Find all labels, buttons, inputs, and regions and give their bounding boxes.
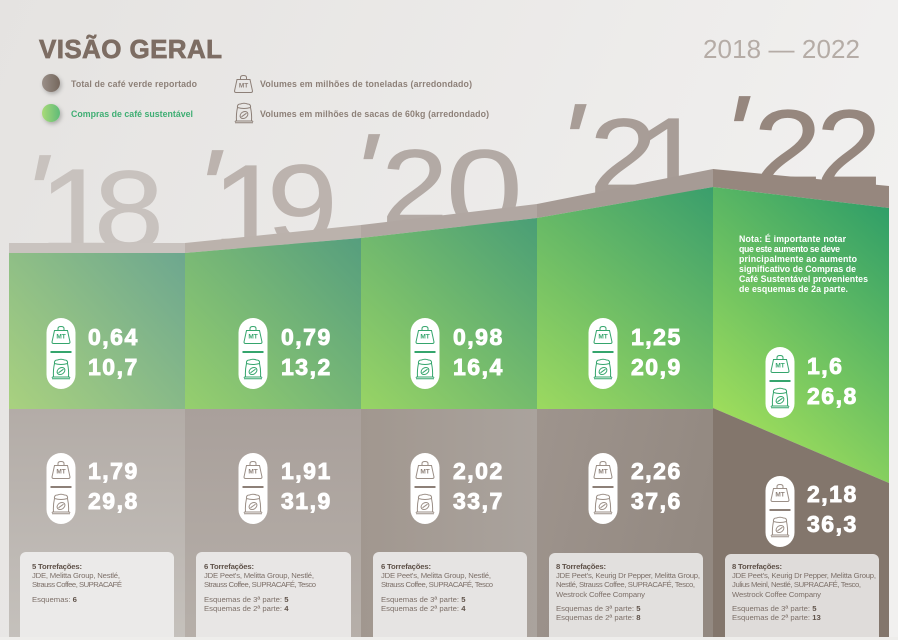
card: 2020: 6 Torrefações: xyxy=(381,562,431,571)
year label: 2022: ' xyxy=(711,74,760,192)
pill: 2020 sustainable: MT xyxy=(420,334,430,340)
band 2018 xyxy=(9,243,185,253)
year label: 2019 xyxy=(184,128,338,274)
pill: 2018 sustainable: MT xyxy=(56,334,66,340)
card: 2018: 5 Torrefações: xyxy=(32,562,82,571)
values: 2022 total: 2,18 xyxy=(807,481,858,507)
sustainable area 2019 xyxy=(185,238,361,409)
year label: 2020: 0 xyxy=(446,126,523,252)
year label: 2018 xyxy=(11,133,164,278)
year label: 2018: ' xyxy=(11,133,61,251)
pill: 2020 total: MT xyxy=(420,468,430,476)
card: 2018: JDE, Melitta Group, Nestlé, xyxy=(32,571,120,580)
card: 2021: Esquemas de 2ª parte: 8 xyxy=(556,613,641,622)
legend: total green coffee: Total de café verde reportado xyxy=(71,79,198,89)
values: 2021 total: 37,6 xyxy=(631,488,682,514)
year label: 2018: 1 xyxy=(39,145,111,278)
year label: 2022 xyxy=(711,74,881,208)
note: Café Sustentável provenientes xyxy=(739,274,868,284)
pill: 2019 total: MT xyxy=(248,468,258,476)
card: 2022: Esquemas de 2ª parte: 13 xyxy=(732,613,821,622)
values: 2018 total: 1,79 xyxy=(88,458,139,484)
band 2021 xyxy=(537,169,713,218)
sustainable area 2020 xyxy=(361,218,537,409)
pill: 2022 sustainable: MT xyxy=(775,362,785,370)
values: 2022 sustainable: 26,8 xyxy=(807,383,858,409)
pill: 2018 sustainable xyxy=(46,318,76,389)
values: 2021 sustainable: 20,9 xyxy=(631,354,682,380)
pill: 2021 sustainable xyxy=(588,318,618,389)
card: 2022 xyxy=(725,554,879,640)
values: 2021 sustainable: 1,25 xyxy=(631,324,682,350)
values: 2019 total: 1,91 xyxy=(281,458,332,484)
column: 2022 xyxy=(713,169,889,640)
card: 2022: Julius Meinl, Nestlé, SUPRACAFÉ, Tesco, xyxy=(732,580,861,589)
pill: 2022 total: MT xyxy=(775,492,785,498)
year label: 2022: 2 xyxy=(816,87,881,208)
note: principalmente ao aumento xyxy=(739,254,858,264)
values: 2019 sustainable: 0,79 xyxy=(281,324,332,350)
card: 2021 xyxy=(549,553,703,640)
note: que este aumento se deve xyxy=(739,244,840,254)
year label: 2021: 1 xyxy=(637,95,705,220)
year label: 2020 xyxy=(340,112,523,252)
values: 2020 sustainable: 16,4 xyxy=(453,354,504,380)
column: 2020 xyxy=(361,204,537,640)
card: 2022: Esquemas de 3ª parte: 5 xyxy=(732,604,817,613)
pill: 2021 total xyxy=(588,453,618,524)
sustainable area 2018 xyxy=(9,253,185,409)
pill: 2020 total xyxy=(410,453,440,524)
values: 2020 total: 2,02 xyxy=(453,458,504,484)
values: 2018 sustainable xyxy=(88,324,139,380)
column: 2019 xyxy=(185,225,361,640)
card: 2022: 8 Torrefações: xyxy=(732,562,782,571)
values: 2019 sustainable xyxy=(281,324,332,380)
values: 2019 total xyxy=(281,458,332,514)
values: 2022 sustainable: 1,6 xyxy=(807,353,843,379)
values: 2018 total: 29,8 xyxy=(88,488,139,514)
sustainable area 2022 xyxy=(713,187,889,483)
card: 2022: Westrock Coffee Company xyxy=(732,590,821,599)
total area 2020 xyxy=(361,409,537,640)
sustainable area 2021 xyxy=(537,187,713,409)
card: 2018: Esquemas: 6 xyxy=(32,595,77,604)
legend: sacks volume: Volumes em milhões de sacas de 60kg (arredondado) xyxy=(260,109,489,119)
pill: 2021 total: MT xyxy=(598,468,608,476)
pill: 2019 sustainable xyxy=(238,318,268,389)
card: 2021: Nestlé, Strauss Coffee, SUPRACAFÉ, Tesco, xyxy=(556,580,695,589)
note: de esquemas de 2a parte. xyxy=(739,284,848,294)
values: 2018 sustainable: 10,7 xyxy=(88,354,139,380)
values: 2019 total: 31,9 xyxy=(281,488,332,514)
values: 2022 total xyxy=(807,481,858,537)
legend xyxy=(42,74,489,123)
legend: sacks volume xyxy=(235,103,489,123)
values: 2022 sustainable xyxy=(807,353,858,409)
pill: 2018 total xyxy=(46,453,76,524)
values: 2022 total: 36,3 xyxy=(807,511,858,537)
total area 2021 xyxy=(537,409,713,640)
column: 2018 xyxy=(9,243,185,640)
column: 2021 xyxy=(537,169,713,640)
card: 2019: Esquemas de 3ª parte: 5 xyxy=(204,595,289,604)
card: 2019: 6 Torrefações: xyxy=(204,562,254,571)
values: 2020 total xyxy=(453,458,504,514)
band 2020 xyxy=(361,204,537,238)
values: 2020 sustainable xyxy=(453,324,504,380)
year label: 2021: ' xyxy=(547,82,596,200)
card: 2020: Esquemas de 3ª parte: 5 xyxy=(381,595,466,604)
year label: 2020: ' xyxy=(340,112,390,230)
card: 2019: Esquemas de 2ª parte: 4 xyxy=(204,604,289,613)
card: 2021: 8 Torrefações: xyxy=(556,562,606,571)
year label: 2019: 1 xyxy=(212,141,284,274)
note: Nota: É importante notar xyxy=(739,234,847,244)
card: 2020 xyxy=(373,552,527,640)
band 2019 xyxy=(185,225,361,253)
total area 2018 xyxy=(9,409,185,640)
legend: total green coffee xyxy=(42,74,198,92)
card: 2022: JDE Peet's, Keurig Dr Pepper, Melitta Group, xyxy=(732,571,876,580)
values: 2020 total: 33,7 xyxy=(453,488,504,514)
legend: tonnes volume xyxy=(234,76,472,92)
year label: 2020: 2 xyxy=(382,128,448,245)
pill: 2020 sustainable xyxy=(410,318,440,389)
legend: tonnes volume: Volumes em milhões de toneladas (arredondado) xyxy=(260,79,472,89)
note xyxy=(739,234,868,294)
title: VISÃO GERAL xyxy=(39,34,222,64)
total area 2022 xyxy=(713,408,889,640)
values: 2020 sustainable: 0,98 xyxy=(453,324,504,350)
card: 2020: Strauss Coffee, SUPRACAFÉ, Tesco xyxy=(381,580,493,589)
card: 2020: Esquemas de 2ª parte: 4 xyxy=(381,604,466,613)
year label: 2022: 2 xyxy=(753,88,822,208)
values: 2018 total xyxy=(88,458,139,514)
card: 2019 xyxy=(196,552,351,640)
pill: 2019 total xyxy=(238,453,268,524)
card: 2018 xyxy=(20,552,174,640)
year label: 2018: 8 xyxy=(94,148,164,273)
card: 2020: JDE Peet's, Melitta Group, Nestlé, xyxy=(381,571,491,580)
values: 2018 sustainable: 0,64 xyxy=(88,324,139,350)
card: 2021: Esquemas de 3ª parte: 5 xyxy=(556,604,641,613)
values: 2021 total xyxy=(631,458,682,514)
year label: 2019: 9 xyxy=(267,143,338,267)
card: 2019: Strauss Coffee, SUPRACAFÉ, Tesco xyxy=(204,580,316,589)
year label: 2021: 2 xyxy=(590,97,657,216)
year label: 2019: ' xyxy=(184,128,233,246)
values: 2019 sustainable: 13,2 xyxy=(281,354,332,380)
card: 2021: Westrock Coffee Company xyxy=(556,590,645,599)
pill: 2022 total xyxy=(766,476,794,547)
values: 2021 total: 2,26 xyxy=(631,458,682,484)
card: 2019: JDE Peet's, Melitta Group, Nestlé, xyxy=(204,571,314,580)
values: 2021 sustainable xyxy=(631,324,682,380)
pill: 2019 sustainable: MT xyxy=(248,334,258,340)
legend: sustainable purchases xyxy=(42,104,193,122)
year label: 2021 xyxy=(547,82,705,220)
note: significativo de Compras de xyxy=(739,264,856,274)
band 2022 xyxy=(713,169,889,208)
card: 2018: Strauss Coffee, SUPRACAFÉ xyxy=(32,580,122,589)
date range: 2018 — 2022 xyxy=(703,34,860,64)
pill: 2018 total: MT xyxy=(56,468,66,476)
card: 2021: JDE Peet's, Keurig Dr Pepper, Melitta Group, xyxy=(556,571,700,580)
legend: tonnes volume: MT xyxy=(239,82,248,90)
legend: sustainable purchases: Compras de café sustentável xyxy=(71,109,193,119)
pill: 2021 sustainable: MT xyxy=(598,334,608,340)
pill: 2022 sustainable xyxy=(766,347,794,418)
total area 2019 xyxy=(185,409,361,640)
